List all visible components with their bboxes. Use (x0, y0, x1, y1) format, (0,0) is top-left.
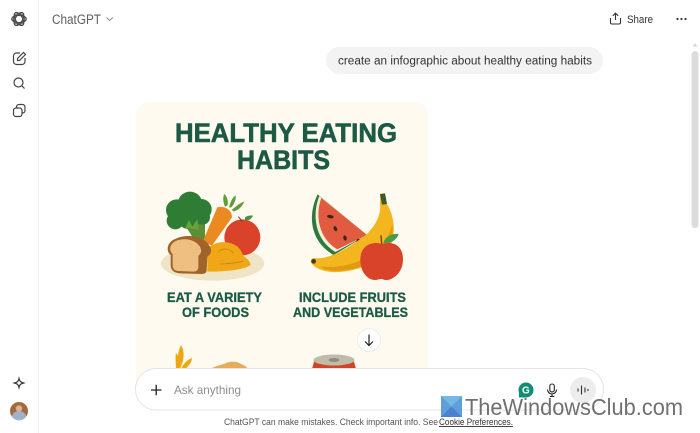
caption: include fruits and vegetables: AND VEGETABLES (293, 305, 408, 320)
illustration: fruits (311, 193, 403, 280)
button: scroll down (358, 328, 380, 352)
icon: user avatar (10, 402, 28, 420)
caption: include fruits and vegetables (293, 290, 408, 320)
user message bubble: create an infographic about healthy eating habits (338, 56, 592, 68)
scrollbar (692, 43, 698, 228)
bread (168, 236, 211, 274)
watermark: TheWindowsClub: TheWindowsClub.com (465, 394, 683, 420)
apple (224, 216, 260, 255)
button: share: Share (627, 14, 653, 26)
icon: voice mode (570, 377, 596, 403)
input: ask anything bar (136, 368, 604, 410)
heading: ChatGPT model selector: ChatGPT (52, 12, 101, 27)
apple (360, 234, 403, 280)
icon: grammarly (518, 382, 534, 398)
golden pastry (207, 242, 251, 272)
title: HEALTHY EATING (175, 118, 397, 148)
illustration: grains mound, cropped (210, 362, 248, 369)
title: HABITS (237, 145, 330, 175)
illustration: variety of foods plate (161, 192, 264, 281)
user message bubble (326, 47, 603, 74)
caption: eat a variety of foods: EAT A VARIETY (167, 290, 262, 305)
broccoli (166, 192, 212, 242)
icon: search (14, 78, 24, 88)
icon: sparkle (14, 378, 24, 388)
carrot (203, 194, 244, 246)
icon: microphone (548, 384, 556, 396)
icon: library (14, 104, 25, 116)
footer disclaimer: Cookie Preferences. (439, 417, 513, 427)
button: share (610, 13, 653, 26)
banana (311, 193, 394, 272)
placeholder text: Ask anything (174, 383, 241, 397)
footer disclaimer: ChatGPT can make mistakes. Check important info. See (224, 417, 438, 427)
caption: eat a variety of foods: OF FOODS (182, 305, 249, 320)
icon: new chat (14, 52, 26, 64)
caption: include fruits and vegetables: INCLUDE FRUITS (299, 290, 406, 305)
panel: infographic card (136, 102, 428, 402)
caption: eat a variety of foods (167, 290, 262, 320)
icon: ChatGPT logo (12, 11, 26, 27)
icon: windows flag (441, 396, 462, 417)
icon: more menu (676, 18, 687, 20)
icon: grammarly: G (522, 386, 530, 396)
watermelon (312, 194, 367, 255)
illustration: wheat, cropped (176, 345, 192, 369)
title (175, 118, 397, 175)
panel: sidebar icons (12, 11, 26, 387)
icon: plus (151, 385, 162, 395)
illustration: soda can, cropped (312, 354, 356, 369)
